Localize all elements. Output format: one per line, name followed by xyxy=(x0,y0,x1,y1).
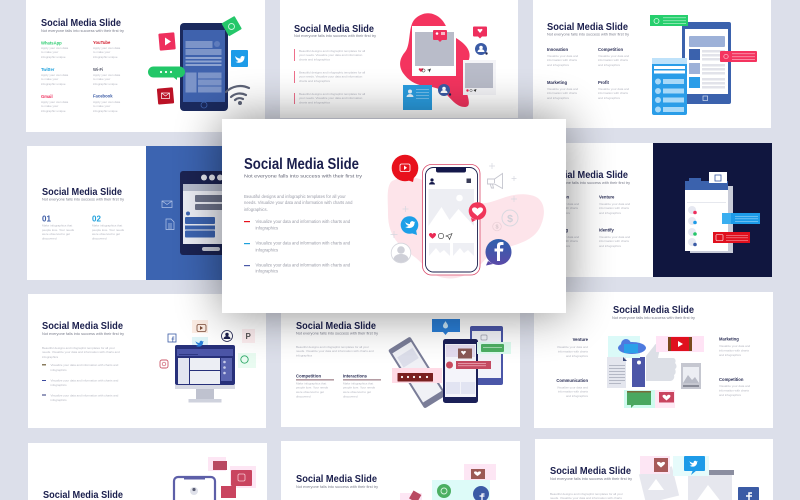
numbered columns: 01 xyxy=(42,214,51,224)
icon: dollar coins: $ xyxy=(495,224,499,230)
slide subtitle: Not everyone falls into success with their first try xyxy=(550,477,632,481)
text blocks with pink bars: Beautiful designs and infographic templates for all xyxy=(299,49,366,53)
hero paragraph: needs. Visualize your data and information with charts and xyxy=(244,200,353,205)
panel: bottom slide right xyxy=(535,439,773,500)
icon: Twitter bubble xyxy=(401,216,418,235)
icon: document xyxy=(607,357,627,388)
callout: comment bar xyxy=(446,361,491,369)
pink blob xyxy=(388,177,544,278)
slide title: Social Media Slide xyxy=(42,186,122,198)
intro paragraph xyxy=(550,492,623,500)
feature grid: Visualize your data and xyxy=(548,235,579,239)
callout: heart bubble xyxy=(458,348,472,358)
intro paragraph: infographics xyxy=(42,355,59,359)
left captions: and infographics xyxy=(566,394,588,398)
left captions: Visualize your data and xyxy=(557,386,588,390)
two columns: people love. Your needs xyxy=(296,386,329,390)
phone xyxy=(422,164,480,275)
right captions: and infographics xyxy=(719,393,742,397)
intro paragraph xyxy=(42,346,120,359)
numbered columns: discovered xyxy=(92,236,107,240)
bullet list: infographics xyxy=(50,383,67,387)
phone illustration xyxy=(174,476,215,500)
right captions: and infographics xyxy=(719,353,742,357)
slide subtitle: Not everyone falls into success with their first try xyxy=(547,32,629,36)
left captions: and infographics xyxy=(566,354,588,358)
icon: WhatsApp xyxy=(238,353,256,368)
icon: YouTube bubble xyxy=(392,155,418,182)
numbered columns: people love. Your needs xyxy=(92,228,125,232)
feature grid: and infographics xyxy=(598,96,621,100)
Facebook tag xyxy=(709,172,727,183)
feature grid: and infographics xyxy=(599,211,622,215)
feature grid: Visualize your data and xyxy=(598,54,629,58)
feature grid: Visualize your data and xyxy=(548,202,579,206)
icon: WhatsApp tile xyxy=(221,16,242,36)
hero paragraph: Beautiful designs and infographic templates for all your xyxy=(244,194,346,199)
tablet illustration xyxy=(682,22,731,104)
icon: Pinterest xyxy=(242,329,255,343)
notification bubbles xyxy=(433,26,487,42)
feature grid: Visualize your data and xyxy=(599,202,630,206)
feature grid: Innovation xyxy=(548,194,569,200)
feature grid: information with charts xyxy=(598,91,629,95)
feature grid xyxy=(547,47,629,100)
slide title: Social Media Slide xyxy=(296,320,376,332)
panel: slide WhatsApp phone xyxy=(26,0,265,132)
panel: slide dark social card xyxy=(540,143,772,277)
icon: dollar coins xyxy=(493,210,518,231)
slide subtitle: Not everyone falls into success with their first try xyxy=(612,316,695,320)
shadow behind hero slide xyxy=(222,119,566,313)
icon: Facebook xyxy=(168,334,176,342)
icon: user avatar xyxy=(391,243,411,263)
feature list: Apply your own data xyxy=(93,73,121,77)
numbered columns: people love. Your needs xyxy=(42,228,75,232)
two columns: discovered xyxy=(343,394,358,398)
right captions: Visualize your data and xyxy=(719,344,750,348)
feature list: to make your xyxy=(41,104,58,108)
feature grid: Marketing xyxy=(547,80,567,85)
feature list: Apply your own data xyxy=(93,100,121,104)
icon: YouTube bubble xyxy=(656,336,704,352)
slide title: Social Media Slide xyxy=(547,21,628,33)
feature list: Apply your own data xyxy=(41,100,69,104)
feature grid: Visualize your data and xyxy=(547,87,578,91)
hero bullet 1: Visualize your data and information with charts and xyxy=(256,219,351,224)
feature list xyxy=(41,40,121,113)
feature grid: information with charts xyxy=(599,239,630,243)
tag icon xyxy=(400,491,422,500)
bullet list: Visualize your data and information with charts and xyxy=(50,394,119,398)
text blocks with pink bars: Beautiful designs and infographic templates for all xyxy=(299,70,366,74)
hero paragraph xyxy=(244,194,353,212)
intro paragraph: needs. Visualize your data and information with charts xyxy=(550,496,622,500)
feature list: to make your xyxy=(93,50,110,54)
feature grid: information with charts xyxy=(547,58,578,62)
two columns: Make infographics that xyxy=(343,382,373,386)
phone illustration: tilted xyxy=(388,336,447,409)
slide title: Social Media Slide xyxy=(613,304,694,316)
feature list: Wi-Fi xyxy=(93,67,103,72)
icon: heart bubble xyxy=(655,390,675,408)
green WhatsApp message bar xyxy=(650,15,688,26)
feature grid: and infographics xyxy=(548,244,571,248)
pink blob xyxy=(400,13,470,107)
slide subtitle: Not everyone falls into success with their first try xyxy=(42,198,124,202)
feature list: Apply your own data xyxy=(93,46,121,50)
left captions: information with charts xyxy=(558,350,588,354)
feature grid: Visualize your data and xyxy=(547,54,578,58)
feature list: Twitter xyxy=(41,67,55,72)
feature list: Facebook xyxy=(93,94,113,98)
icon: YouTube tile xyxy=(158,32,176,51)
numbered columns: were observed to get xyxy=(42,232,70,236)
bullet list xyxy=(42,363,119,402)
feature grid: Venture xyxy=(599,194,615,200)
callout: blue drop tag xyxy=(432,319,460,335)
feature list: infographic unique xyxy=(93,82,118,86)
feature grid: and infographics xyxy=(599,244,622,248)
feature grid: and infographics xyxy=(547,96,570,100)
feature list: infographic unique xyxy=(93,55,118,59)
intro paragraph: needs. Visualize your data and information with charts and xyxy=(42,350,120,354)
hero bullet 3: Visualize your data and information with charts and xyxy=(256,262,351,268)
icon: Instagram xyxy=(160,360,168,368)
callout: green message xyxy=(477,342,511,354)
thumbs up illustration xyxy=(632,344,676,387)
hero bullet 3 xyxy=(244,262,351,274)
bullet list: infographics xyxy=(50,398,67,402)
slide subtitle: Not everyone falls into success with their first try xyxy=(41,29,124,33)
panel: bottom slide middle xyxy=(281,441,520,500)
feature list: infographic unique xyxy=(41,82,66,86)
slide subtitle: Not everyone falls into success with their first try xyxy=(296,485,378,489)
feature list: infographic unique xyxy=(41,55,66,59)
hero bullet 2 xyxy=(244,240,351,252)
two columns: discovered xyxy=(296,394,311,398)
hero title: Social Media Slide xyxy=(244,156,359,173)
red message bar xyxy=(720,51,757,62)
feature list: WhatsApp xyxy=(41,40,62,46)
text blocks with pink bars: Beautiful designs and infographic templates for all xyxy=(299,92,366,96)
text blocks with pink bars: your needs. Visualize your data and information xyxy=(299,96,363,100)
monitor illustration xyxy=(175,345,235,402)
text blocks with pink bars xyxy=(294,49,366,104)
left captions xyxy=(556,337,589,398)
feature grid: information with charts xyxy=(547,91,578,95)
post card large xyxy=(412,26,456,76)
feature list: to make your xyxy=(41,50,58,54)
panel: slide Instagram posts xyxy=(280,0,518,118)
feature list: Apply your own data xyxy=(41,73,69,77)
left captions: Venture xyxy=(573,337,589,342)
feature grid: and infographics xyxy=(548,211,571,215)
bullet list: Visualize your data and information with charts and xyxy=(50,378,119,382)
panel: slide blue chat phone xyxy=(27,146,230,280)
text blocks with pink bars: charts and infographics xyxy=(299,58,331,62)
icon: Twitter tile xyxy=(231,50,248,67)
text blocks with pink bars: charts and infographics xyxy=(299,100,331,104)
hero bullet 3: infographics xyxy=(256,268,278,274)
numbered columns: were observed to get xyxy=(92,232,120,236)
icon: YouTube xyxy=(192,320,208,333)
sparkle marks xyxy=(390,163,517,238)
slide title: Social Media Slide xyxy=(550,465,631,477)
two columns xyxy=(296,374,381,398)
hero subtitle: Not everyone falls into success with their first try xyxy=(244,174,363,178)
feature list: infographic unique xyxy=(41,109,66,113)
WhatsApp and Facebook icons xyxy=(432,480,490,500)
hero bullet 1: infographics xyxy=(256,226,278,230)
two columns: Make infographics that xyxy=(296,382,326,386)
YouTube bar xyxy=(713,232,750,243)
intro paragraph xyxy=(296,345,374,358)
panel: slide monitor xyxy=(28,294,266,428)
feature grid: Visualize your data and xyxy=(598,87,629,91)
numbered columns: 02 xyxy=(92,214,101,224)
photo cards xyxy=(639,466,734,500)
icon: Gmail tile xyxy=(157,87,174,105)
icon: Twitter xyxy=(192,337,208,347)
icon: envelope xyxy=(162,201,172,208)
intro paragraph: needs. Visualize your data and information with charts and xyxy=(296,349,374,353)
slide title: Social Media Slide xyxy=(296,473,377,485)
phone illustration: front xyxy=(443,339,478,403)
chat phone xyxy=(180,171,230,255)
heart notification xyxy=(640,456,670,474)
numbered columns: Make infographics that xyxy=(42,224,72,228)
icon: user xyxy=(222,330,232,342)
feature list: to make your xyxy=(93,77,110,81)
feature grid: Identify xyxy=(599,228,615,232)
feature grid: information with charts xyxy=(598,58,629,62)
panel: slide tablet and chat xyxy=(533,0,771,128)
icon: cloud xyxy=(608,336,646,358)
blue list phone xyxy=(652,58,687,115)
slide subtitle: Not everyone falls into success with their first try xyxy=(42,332,124,336)
icon: megaphone xyxy=(488,174,502,188)
slide title: Social Media Slide xyxy=(41,17,121,29)
text blocks with pink bars: charts and infographics xyxy=(299,79,331,83)
phone illustration xyxy=(180,23,228,111)
text blocks with pink bars: your needs. Visualize your data and information xyxy=(299,53,363,57)
feature list: Apply your own data xyxy=(41,46,69,50)
two columns: were observed to get xyxy=(296,390,324,394)
icon: document xyxy=(166,219,174,230)
post card small xyxy=(463,60,496,95)
hero bullet 2: Visualize your data and information with charts and xyxy=(256,240,351,246)
slide subtitle: Not everyone falls into success with their first try xyxy=(296,332,378,336)
feature grid: Competition xyxy=(598,47,623,52)
feature grid: information with charts xyxy=(599,206,630,210)
panel: slide phones reviews xyxy=(281,300,520,427)
icon: image card xyxy=(681,363,701,389)
intro paragraph: infographics xyxy=(296,354,313,358)
feature list: Gmail xyxy=(41,94,53,99)
avatar icons xyxy=(438,43,488,96)
slide title: Social Media Slide xyxy=(42,320,123,332)
icon: Facebook bubble xyxy=(486,239,512,266)
intro paragraph: Beautiful designs and infographic templates for all your xyxy=(42,346,115,350)
bullet list: infographics xyxy=(50,368,67,372)
right captions xyxy=(719,336,750,397)
hero paragraph: infographics. xyxy=(244,207,268,212)
slide subtitle: Not everyone falls into success with their first try xyxy=(294,34,376,38)
feature grid: Visualize your data and xyxy=(599,235,630,239)
notification icons xyxy=(208,457,256,498)
icon: Wi-Fi xyxy=(226,86,249,104)
social feed card xyxy=(685,178,733,253)
right captions: Competition xyxy=(719,377,744,382)
right captions: information with charts xyxy=(719,348,750,352)
slide subtitle: Not everyone falls into success with their first try xyxy=(548,181,630,185)
panel: hero slide xyxy=(222,119,566,313)
feature grid: and infographics xyxy=(598,63,621,67)
two columns: Interactions xyxy=(343,374,368,378)
icon: dollar coins: $ xyxy=(507,213,513,225)
text blocks with pink bars: your needs. Visualize your data and information xyxy=(299,74,363,78)
feature grid: Marketing xyxy=(548,228,568,232)
feature grid: and infographics xyxy=(547,63,570,67)
two columns: were observed to get xyxy=(343,390,371,394)
panel: bottom slide left xyxy=(28,443,267,500)
slide title: Social Media Slide xyxy=(294,23,374,35)
intro paragraph: Beautiful designs and infographic templates for all your xyxy=(296,345,369,349)
feature grid xyxy=(548,194,630,248)
two columns: Competition xyxy=(296,374,321,378)
Facebook tile xyxy=(738,487,759,500)
right captions: information with charts xyxy=(719,388,750,392)
feature grid: information with charts xyxy=(548,206,579,210)
feature list: to make your xyxy=(41,77,58,81)
heart notification xyxy=(464,464,496,480)
numbered columns xyxy=(42,214,125,240)
panel: slide thumbs up xyxy=(534,292,773,428)
Twitter bar xyxy=(722,213,760,224)
hero bullet 2: infographics xyxy=(256,248,278,252)
left captions: information with charts xyxy=(558,390,588,394)
numbered columns: Make infographics that xyxy=(92,224,122,228)
left captions: Communication xyxy=(556,378,588,383)
intro paragraph: Beautiful designs and infographic templates for all your xyxy=(550,492,623,496)
Twitter notification xyxy=(673,456,709,476)
right captions: Visualize your data and xyxy=(719,384,750,388)
phone illustration: back xyxy=(470,326,503,385)
bullet list: Visualize your data and information with charts and xyxy=(50,363,119,367)
slide title: Social Media Slide xyxy=(548,169,628,181)
blue profile card xyxy=(403,85,432,110)
feature grid: Innovation xyxy=(547,47,568,52)
hero bullet 1 xyxy=(244,219,351,230)
feature grid: Profit xyxy=(598,80,610,85)
feature grid: information with charts xyxy=(548,239,579,243)
left captions: Visualize your data and xyxy=(557,345,588,349)
icon: green chat xyxy=(624,390,656,408)
icon: green chat bubble xyxy=(148,66,185,80)
callout: star rating xyxy=(392,368,442,383)
right captions: Marketing xyxy=(719,336,739,342)
feature list: to make your xyxy=(93,104,110,108)
icon: Pinterest: P xyxy=(246,332,252,341)
feature list: YouTube xyxy=(93,40,111,45)
two columns: people love. Your needs xyxy=(343,386,376,390)
feature list: infographic unique xyxy=(93,109,118,113)
numbered columns: discovered xyxy=(42,236,57,240)
icon: heart bubble xyxy=(469,202,486,222)
